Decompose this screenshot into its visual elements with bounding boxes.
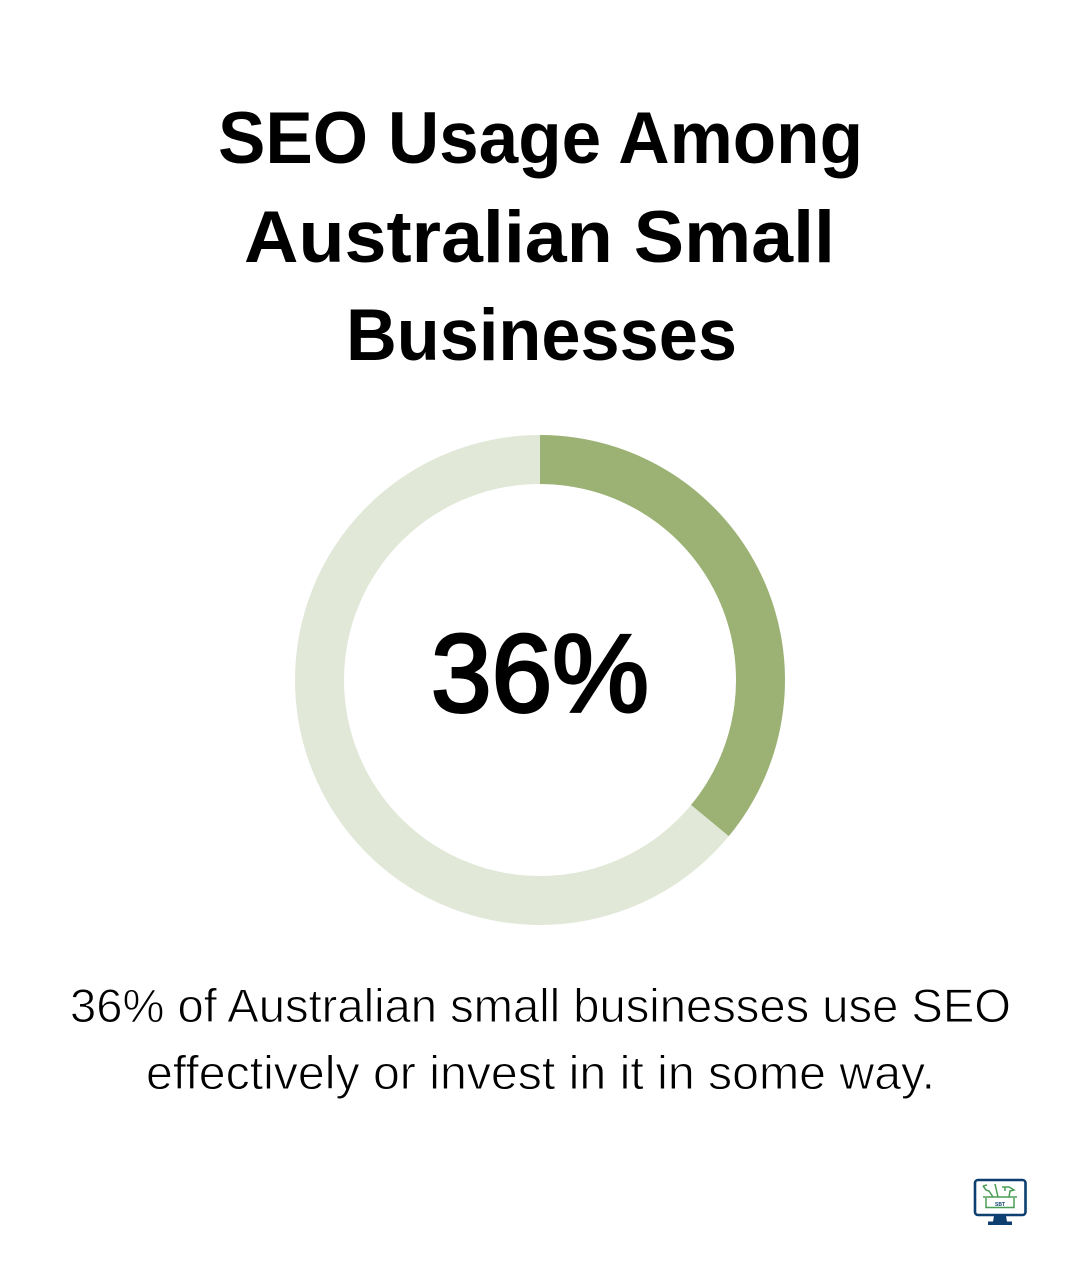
monitor [975, 1180, 1026, 1215]
toolbox [983, 1184, 1017, 1208]
description text: effectively or invest in it in some way. [146, 1046, 935, 1099]
title: SEO Usage Among [218, 98, 863, 179]
donut track [320, 460, 760, 900]
donut chart: 36% [320, 435, 785, 900]
donut centre value: 36% [431, 612, 649, 736]
title: Australian Small [244, 197, 835, 278]
logo text: SBT [995, 1202, 1005, 1208]
icon: SBT toolbox monitor logo [975, 1180, 1026, 1225]
title: Businesses [346, 295, 737, 376]
title [218, 98, 863, 376]
description text [70, 979, 1011, 1099]
donut value segment [540, 435, 785, 836]
description text: 36% of Australian small businesses use SEO [70, 979, 1011, 1032]
